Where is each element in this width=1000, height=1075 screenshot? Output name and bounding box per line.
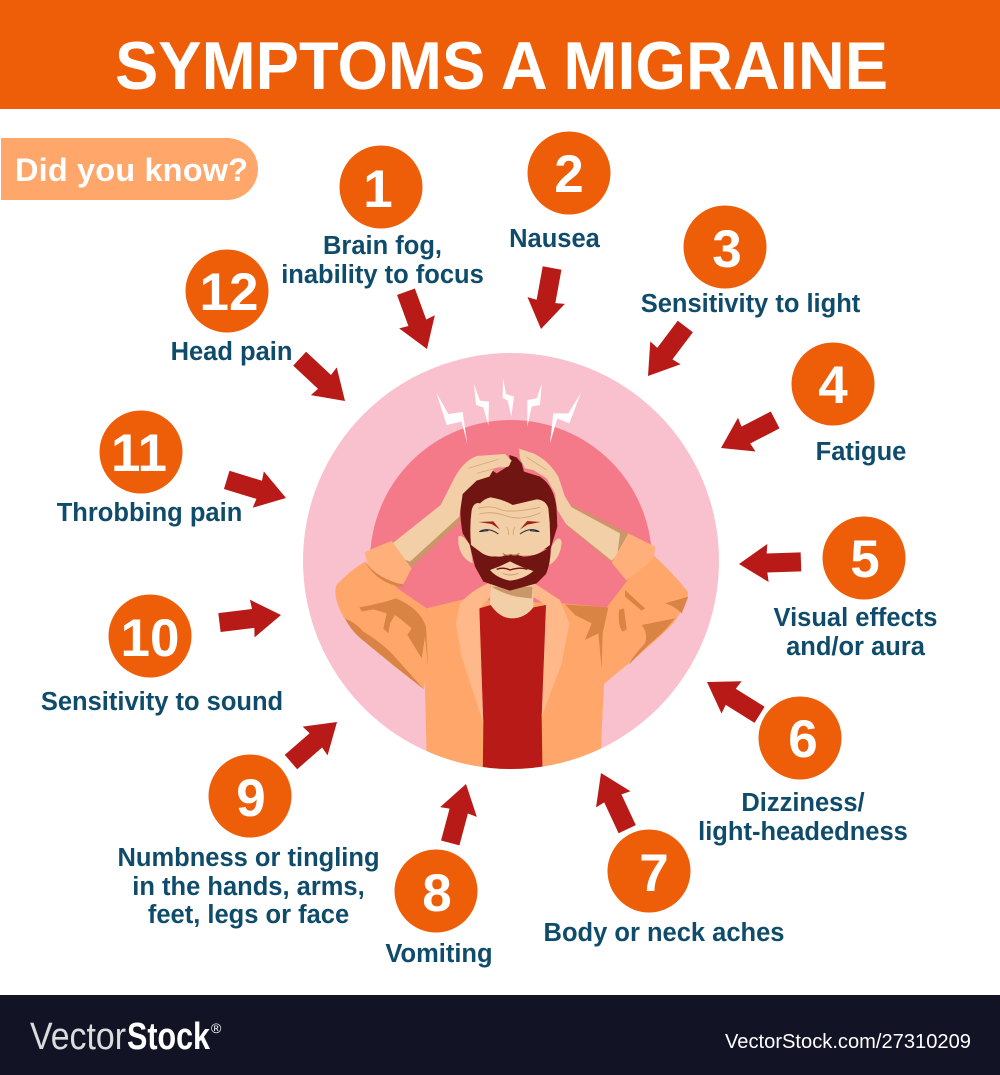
footer url: VectorStock.com/27310209	[725, 1031, 971, 1053]
footer logo: Vector	[30, 1016, 126, 1058]
label 2: Nausea	[509, 225, 601, 253]
label 4: Fatigue	[816, 438, 906, 466]
badge 11: 11	[111, 424, 167, 483]
symptom 8	[385, 850, 493, 968]
badge 4: 4	[818, 356, 848, 415]
arms and hands	[405, 516, 460, 568]
illustration: man with migraine	[303, 353, 719, 783]
arrow 6	[697, 666, 770, 731]
arrow 1	[388, 285, 445, 356]
label 3: Sensitivity to light	[641, 290, 861, 318]
title banner	[0, 0, 1000, 109]
badge 5: 5	[850, 530, 880, 589]
badge 8: 8	[422, 864, 452, 923]
man figure	[335, 378, 688, 783]
badge 9: 9	[236, 769, 266, 828]
badge 5	[822, 516, 906, 600]
title banner: SYMPTOMS A MIGRAINE	[115, 28, 888, 104]
inner pink circle	[370, 420, 652, 702]
badge 6: 6	[788, 710, 818, 769]
arrow 11	[221, 462, 292, 516]
did you know pill: Did you know?	[15, 152, 248, 188]
badge 12: 12	[200, 263, 258, 322]
footer logo: Stock	[127, 1016, 211, 1058]
arrow 2	[522, 265, 571, 332]
badge 10: 10	[121, 609, 179, 668]
badge 10	[108, 594, 192, 678]
footer bar	[0, 995, 1000, 1075]
label 9: in the hands, arms,	[132, 873, 365, 901]
label 5: Visual effects	[774, 604, 937, 632]
badge 3: 3	[712, 220, 742, 279]
arrow 8	[432, 779, 484, 848]
outer pink circle	[303, 353, 719, 769]
label 12: Head pain	[171, 338, 292, 366]
badge 11	[100, 410, 182, 494]
footer logo	[30, 1016, 222, 1058]
label 5: and/or aura	[786, 633, 926, 661]
label 8: Vomiting	[385, 940, 493, 968]
symptom 11	[57, 410, 242, 527]
badge 6	[758, 696, 842, 780]
badge 7: 7	[639, 844, 669, 903]
symptom 1	[281, 146, 484, 289]
badge 2: 2	[554, 145, 584, 204]
symptom 5	[774, 516, 937, 661]
label 9: feet, legs or face	[148, 901, 349, 929]
arrow 5	[738, 543, 802, 583]
did you know pill	[1, 138, 258, 200]
arrow 9	[278, 708, 349, 776]
symptom 12	[171, 250, 292, 366]
arrow 12	[287, 345, 358, 415]
symptom 3	[641, 206, 861, 318]
label 1: inability to focus	[281, 261, 484, 289]
footer logo: ®	[211, 1020, 222, 1036]
lightning bolts	[436, 378, 581, 444]
arrow 7	[584, 765, 644, 837]
arrow 10	[217, 596, 283, 641]
arrow 3	[633, 315, 700, 387]
badge 7	[608, 830, 690, 912]
label 6: light-headedness	[698, 818, 908, 846]
symptom 10	[41, 594, 283, 716]
label 11: Throbbing pain	[57, 499, 242, 527]
label 1: Brain fog,	[323, 232, 442, 260]
label 9: Numbness or tingling	[117, 844, 380, 872]
label 7: Body or neck aches	[544, 919, 784, 947]
badge 9	[208, 754, 292, 838]
label 6: Dizziness/	[741, 789, 865, 817]
arrow 4	[712, 403, 784, 465]
symptom 7	[544, 830, 784, 947]
symptom 4	[792, 342, 906, 466]
symptom 6	[698, 696, 908, 846]
label 10: Sensitivity to sound	[41, 688, 283, 716]
badge 1	[340, 146, 422, 228]
symptom 2	[509, 132, 610, 253]
badge 3	[684, 206, 766, 288]
badge 1: 1	[363, 160, 393, 219]
symptom 9	[117, 754, 380, 929]
